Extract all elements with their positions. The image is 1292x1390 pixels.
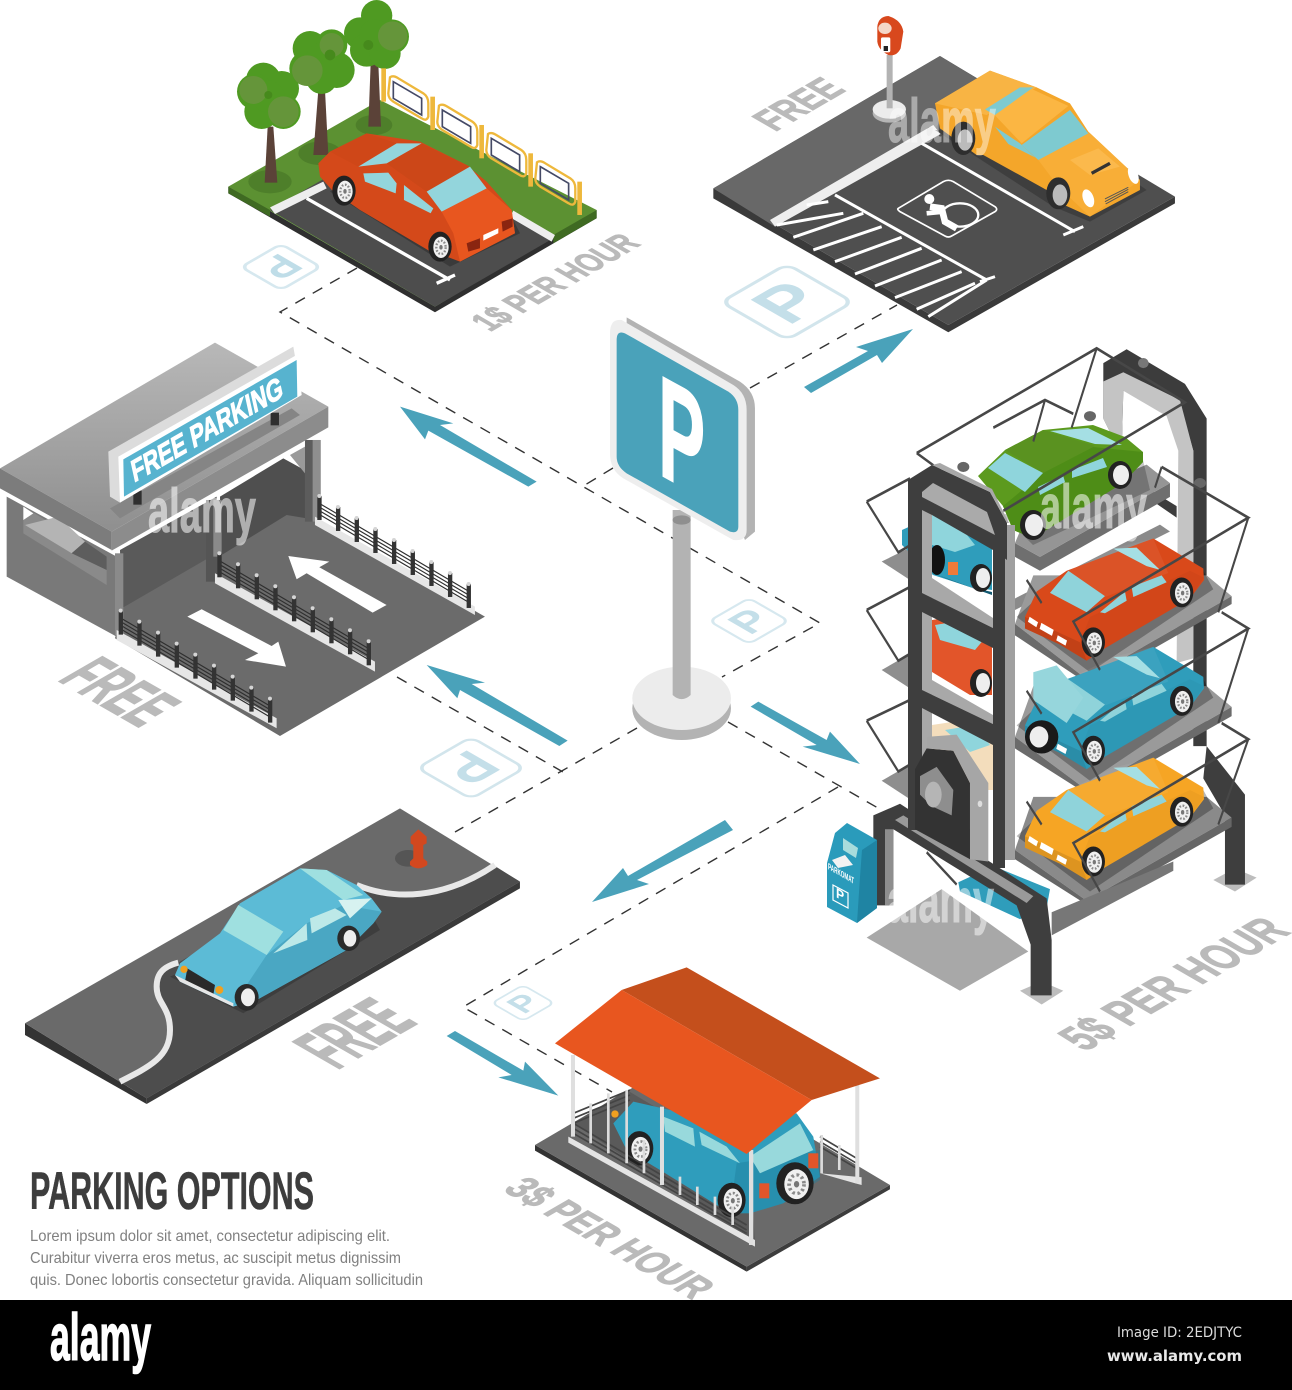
description text: Curabitur viverra eros metus, ac suscipit metus dignissim (30, 1250, 401, 1267)
icon: faint P sign lower left (416, 736, 525, 799)
dashed connector lines (280, 268, 897, 1092)
watermarks (148, 87, 1147, 936)
arrow: to carport (447, 1031, 558, 1096)
icon: faint P sign top left (240, 243, 321, 290)
icon: faint P sign top left: P (248, 248, 313, 286)
back cars seen through frame windows (902, 515, 993, 790)
icon: faint P sign lower left: P (427, 743, 514, 793)
icon: wheelchair marking (898, 180, 997, 237)
red car (318, 133, 520, 267)
panel: free parking building (0, 343, 485, 736)
parkomat terminal: PARKOMAT (828, 861, 854, 886)
arrow: to building (427, 665, 568, 746)
icon: faint P sign centre: P (717, 602, 782, 640)
icon: faint P sign top right (721, 264, 855, 341)
back arch (957, 349, 1207, 746)
arrow: to top right (804, 329, 913, 393)
label: 3$ per hour: 3$ PER HOUR (494, 1171, 725, 1305)
wire baskets (867, 348, 1248, 891)
footer bar: alamy (50, 1300, 151, 1374)
carport roof (555, 967, 880, 1154)
footer bar: Image ID: 2EDJTYC (1117, 1325, 1242, 1341)
lift machine (915, 735, 988, 861)
panel: carport (535, 967, 890, 1272)
carport posts (571, 1055, 859, 1245)
right rear leg (1203, 746, 1245, 885)
label: free building: FREE (43, 648, 196, 736)
front frame (908, 463, 1015, 868)
icon: faint P sign bottom (492, 985, 555, 1022)
panel: grass parking lot (228, 0, 597, 312)
yellow fence (381, 68, 582, 215)
parkomat terminal (827, 823, 877, 923)
panel: street parking (25, 808, 520, 1104)
label: 1$ per hour: 1$ PER HOUR (461, 228, 648, 336)
watermarks: alamy (148, 477, 256, 546)
icon: faint P sign top right: P (734, 271, 842, 334)
parking meter (873, 16, 906, 123)
label: free street: FREE (276, 987, 433, 1079)
driveway arrows (187, 556, 387, 667)
arrow: to tower (751, 702, 860, 764)
panel: automated parking tower (867, 348, 1257, 1005)
label: free top right: FREE (742, 71, 855, 137)
fences (117, 494, 475, 728)
description text (30, 1228, 423, 1289)
icon: faint P sign centre (709, 598, 790, 645)
footer bar: www.alamy.com (1107, 1347, 1242, 1365)
icon: faint P sign bottom: P (498, 988, 549, 1018)
base frame and legs (873, 804, 1052, 995)
arrow: to lower left (592, 820, 733, 902)
blue car (170, 868, 382, 1013)
central parking sign (610, 317, 755, 740)
arrow: to top left (400, 407, 537, 487)
yellow sports car (935, 71, 1147, 222)
description text: Lorem ipsum dolor sit amet, consectetur adipiscing elit. (30, 1228, 390, 1245)
yellow car (1017, 758, 1213, 891)
watermarks: alamy (1040, 473, 1147, 542)
watermarks: alamy (887, 867, 994, 936)
footer bar (0, 1300, 1292, 1390)
platforms (1015, 465, 1232, 935)
central parking sign: P (658, 344, 705, 530)
watermarks: alamy (888, 87, 996, 156)
parkomat terminal: P (836, 884, 844, 905)
billboard: FREE PARKING (128, 370, 286, 490)
trees (237, 0, 409, 183)
carport railing (568, 1090, 862, 1247)
red car (1017, 538, 1213, 672)
panel: disabled parking lot (713, 16, 1175, 332)
lower blue car (958, 866, 1050, 919)
title: PARKING OPTIONS (30, 1162, 314, 1221)
left platforms (882, 548, 910, 799)
green car (978, 425, 1150, 545)
blue car (1017, 647, 1213, 781)
description text: quis. Donec lobortis consectetur gravida. Aliquam sollicitudin (30, 1272, 423, 1289)
hydrant (395, 829, 427, 868)
blue van (611, 1102, 820, 1217)
